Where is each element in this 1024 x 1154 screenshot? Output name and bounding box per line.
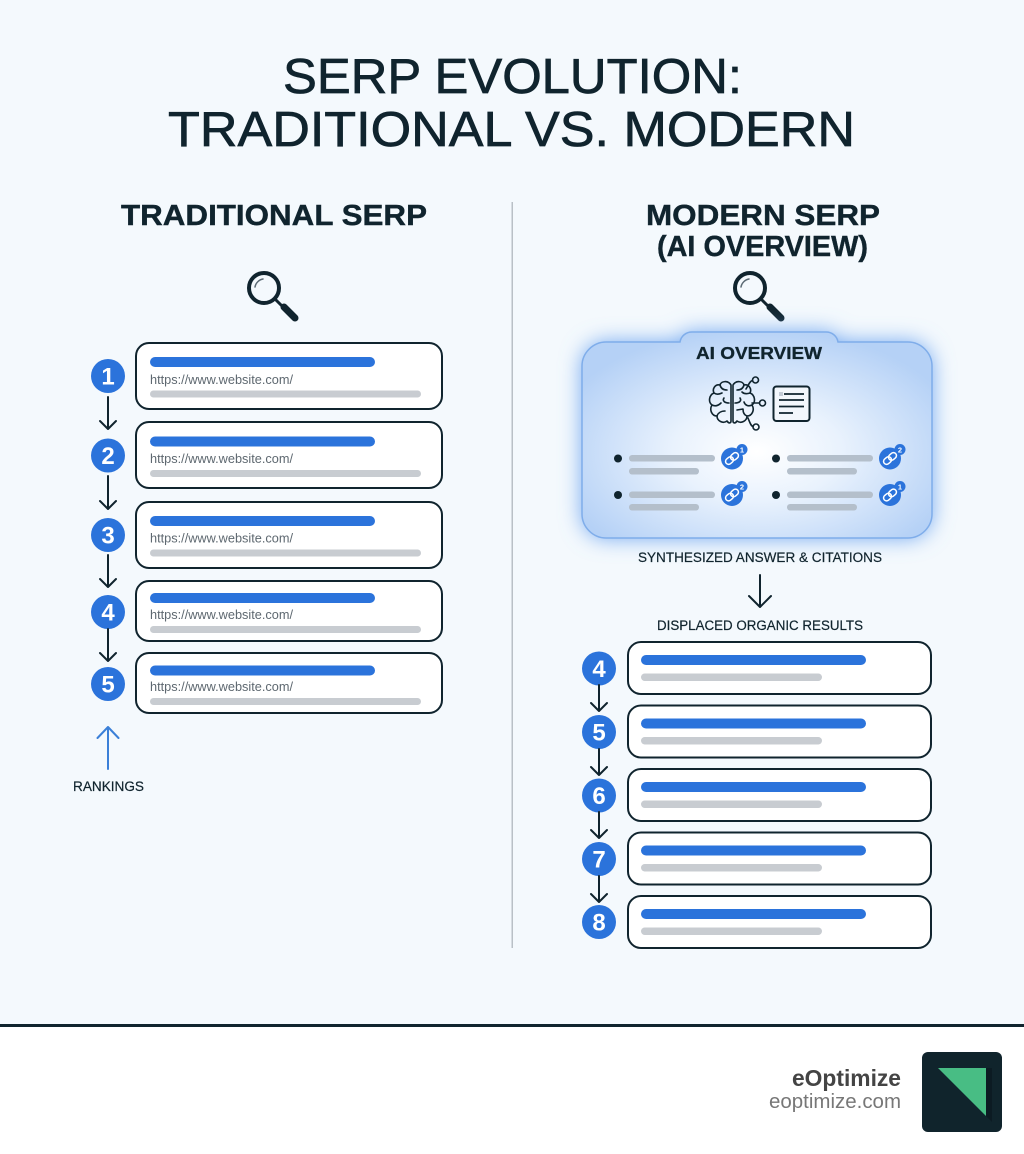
result 4: 4 (101, 600, 115, 626)
title: TRADITIONAL VS. MODERN (168, 103, 855, 157)
heading: traditional SERP: TRADITIONAL SERP (121, 200, 427, 232)
citation row 2 right (772, 481, 906, 510)
arrow: rankings up (98, 727, 118, 769)
result 5: https://www.website.com/ (150, 680, 294, 694)
citation row 1 left (614, 444, 748, 474)
result 5: 5 (101, 672, 115, 698)
footer (0, 1024, 1024, 1154)
result 4 (91, 581, 442, 661)
icon: magnifying glass (735, 273, 781, 318)
result 3: https://www.website.com/ (150, 532, 294, 546)
heading: modern SERP: (AI OVERVIEW) (657, 231, 868, 263)
organic result 8: 8 (592, 910, 606, 936)
result 1: https://www.website.com/ (150, 373, 294, 387)
result 5 (91, 653, 442, 713)
arrow: down to displaced results (749, 575, 771, 607)
result 2: https://www.website.com/ (150, 452, 294, 466)
result 4: https://www.website.com/ (150, 608, 294, 622)
organic result 5 (582, 706, 931, 775)
result 3 (91, 502, 442, 587)
brand name: eOptimize (792, 1065, 901, 1091)
result 1: 1 (101, 364, 115, 390)
organic result 8 (582, 896, 931, 948)
panel: AI overview (582, 332, 932, 538)
brand url: eoptimize.com (769, 1091, 901, 1113)
citation row 2 right: 1 (898, 482, 902, 492)
icon: logo (922, 1052, 1002, 1132)
result 1 (91, 343, 442, 429)
title (168, 50, 855, 157)
heading: modern SERP (646, 200, 880, 263)
citation row 1 right (772, 444, 906, 474)
result 2 (91, 422, 442, 509)
result 3: 3 (101, 522, 115, 550)
citation row 1 left: 1 (740, 446, 744, 454)
icon: document (774, 386, 810, 421)
citation row 2 left (614, 481, 748, 510)
heading: modern SERP: MODERN SERP (646, 200, 880, 232)
panel: traditional SERP (73, 200, 442, 794)
organic result 7 (582, 832, 931, 902)
panel: modern SERP (582, 200, 932, 948)
organic result 5: 5 (592, 720, 606, 746)
label: rankings: RANKINGS (73, 779, 144, 794)
citation row 1 right: 2 (898, 446, 902, 454)
center divider (512, 202, 513, 948)
icon: brain with nodes (710, 377, 766, 430)
label: synthesized answer: SYNTHESIZED ANSWER & CITATIONS (638, 550, 882, 565)
citation row 2 left: 2 (740, 482, 744, 492)
organic result 7: 7 (592, 846, 606, 874)
organic result 6 (582, 769, 931, 838)
organic result 6: 6 (592, 783, 606, 810)
heading: AI overview: AI OVERVIEW (696, 343, 823, 363)
organic result 4 (582, 642, 931, 711)
icon: magnifying glass (249, 273, 295, 318)
label: displaced organic results: DISPLACED ORGANIC RESULTS (657, 618, 863, 633)
result 2: 2 (101, 443, 115, 470)
title: SERP EVOLUTION: (283, 50, 742, 104)
organic result 4: 4 (592, 656, 606, 683)
